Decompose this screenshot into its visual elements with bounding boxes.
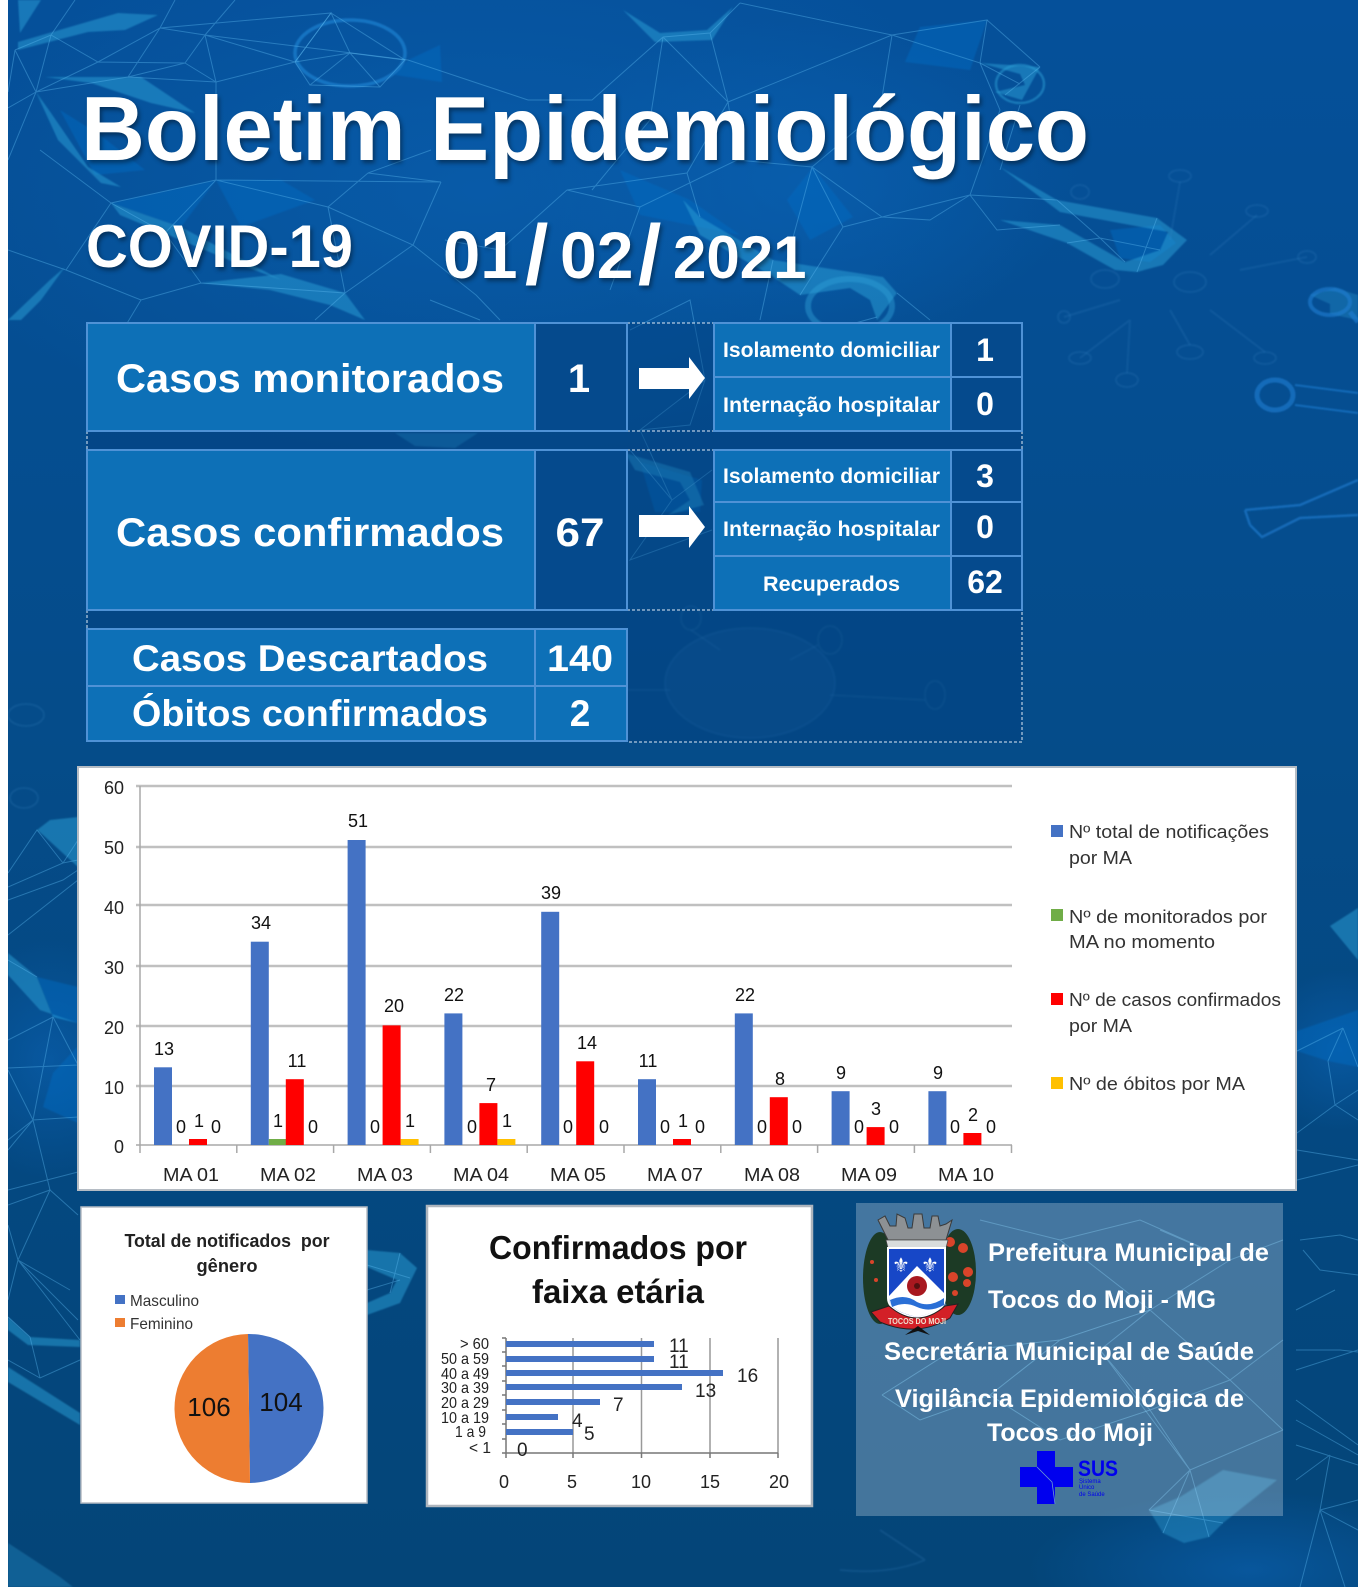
credits text: Vigilância Epidemiológica de bbox=[895, 1385, 1244, 1413]
breakdown: casos monitorados: 0 bbox=[976, 386, 994, 422]
icon: SUS logo: Único bbox=[1079, 1484, 1095, 1491]
icon: SUS logo bbox=[1020, 1451, 1118, 1504]
legend bbox=[1051, 822, 1281, 1094]
breakdown: casos confirmados: 3 bbox=[976, 458, 994, 494]
row: casos monitorados: Casos monitorados bbox=[116, 357, 504, 401]
pie legend bbox=[115, 1293, 199, 1333]
data labels: 1 bbox=[405, 1111, 415, 1131]
row: casos descartados: Casos Descartados bbox=[132, 638, 488, 679]
category labels: MA 03 bbox=[357, 1165, 413, 1185]
row: casos descartados: 140 bbox=[547, 638, 613, 679]
lighter mesh facets bbox=[37, 20, 1358, 1123]
data labels: 0 bbox=[370, 1117, 380, 1137]
breakdown: casos monitorados: 1 bbox=[976, 332, 994, 368]
panel: institution credits bbox=[856, 1203, 1283, 1516]
pie title bbox=[124, 1231, 330, 1276]
y axis labels: 10 bbox=[104, 1078, 124, 1098]
icon: municipal crest: TOCOS DO MOJI bbox=[888, 1317, 946, 1326]
age values: 4 bbox=[572, 1411, 583, 1432]
data labels: 34 bbox=[251, 913, 271, 933]
date: 01 bbox=[443, 218, 518, 293]
summary table bbox=[87, 323, 1022, 742]
age values: 5 bbox=[584, 1424, 595, 1445]
category labels: MA 09 bbox=[841, 1165, 897, 1185]
pie title: gênero bbox=[196, 1256, 258, 1276]
data labels: 0 bbox=[660, 1117, 670, 1137]
age values: 11 bbox=[669, 1352, 689, 1373]
icon: SUS logo: de Saúde bbox=[1079, 1492, 1105, 1498]
credits text bbox=[884, 1239, 1269, 1447]
row: casos confirmados: Casos confirmados bbox=[116, 511, 504, 555]
data labels: 13 bbox=[154, 1039, 174, 1059]
category labels: MA 01 bbox=[163, 1165, 219, 1185]
data labels: 0 bbox=[950, 1117, 960, 1137]
data labels: 1 bbox=[273, 1111, 283, 1131]
age x axis: 5 bbox=[567, 1472, 577, 1492]
date: 02 bbox=[560, 218, 633, 292]
icon: municipal crest: ⚜ bbox=[892, 1255, 910, 1277]
breakdown: casos confirmados: Isolamento domiciliar bbox=[723, 465, 940, 488]
pie: 104 bbox=[259, 1387, 303, 1417]
date: 2021 bbox=[673, 224, 806, 291]
row: casos descartados bbox=[87, 629, 627, 686]
data labels: 0 bbox=[889, 1117, 899, 1137]
age labels: 10 a 19 bbox=[441, 1410, 489, 1427]
arrow bbox=[639, 357, 705, 399]
date: / bbox=[525, 208, 548, 302]
data labels: 1 bbox=[678, 1111, 688, 1131]
data labels: 2 bbox=[968, 1105, 978, 1125]
age values bbox=[517, 1336, 758, 1461]
legend: Nº de monitorados por bbox=[1069, 907, 1267, 927]
data labels: 0 bbox=[563, 1117, 573, 1137]
age labels: > 60 bbox=[460, 1336, 489, 1353]
legend: Nº de casos confirmados bbox=[1069, 990, 1281, 1010]
row: casos monitorados: 1 bbox=[568, 357, 590, 401]
y axis labels: 50 bbox=[104, 838, 124, 858]
data labels: 20 bbox=[384, 996, 404, 1016]
age values: 13 bbox=[695, 1381, 716, 1402]
data labels: 11 bbox=[288, 1051, 306, 1071]
data labels: 51 bbox=[348, 811, 368, 831]
row: casos confirmados bbox=[87, 450, 627, 610]
breakdown: casos confirmados: 62 bbox=[967, 564, 1003, 600]
data labels: 9 bbox=[933, 1063, 943, 1083]
data labels: 0 bbox=[854, 1117, 864, 1137]
icon: municipal crest: ⚜ bbox=[921, 1255, 939, 1277]
age labels: 20 a 29 bbox=[441, 1395, 489, 1412]
age labels: < 1 bbox=[469, 1440, 491, 1457]
data labels: 39 bbox=[541, 883, 561, 903]
age chart title bbox=[489, 1229, 747, 1310]
category labels bbox=[163, 1165, 994, 1185]
category labels: MA 08 bbox=[744, 1165, 800, 1185]
pie: 106 bbox=[187, 1392, 231, 1422]
data labels: 0 bbox=[792, 1117, 802, 1137]
virus knobs and rings bbox=[295, 20, 1358, 537]
category labels: MA 02 bbox=[260, 1165, 316, 1185]
data labels: 0 bbox=[757, 1117, 767, 1137]
data labels: 0 bbox=[986, 1117, 996, 1137]
pie legend: Feminino bbox=[130, 1316, 193, 1333]
category labels: MA 04 bbox=[453, 1165, 509, 1185]
arrow bbox=[639, 506, 705, 548]
credits text: Tocos do Moji - MG bbox=[988, 1286, 1216, 1314]
row: óbitos confirmados: Óbitos confirmados bbox=[132, 692, 488, 734]
age labels: 1 a 9 bbox=[455, 1424, 486, 1441]
age bars bbox=[506, 1341, 723, 1435]
breakdown: casos monitorados bbox=[714, 323, 1022, 431]
row: casos confirmados: 67 bbox=[556, 511, 604, 555]
data labels: 11 bbox=[639, 1051, 657, 1071]
bars: confirmed bbox=[189, 1025, 981, 1145]
row: óbitos confirmados: 2 bbox=[570, 693, 590, 734]
data labels: 0 bbox=[308, 1117, 318, 1137]
age x axis bbox=[499, 1472, 789, 1492]
data labels: 1 bbox=[502, 1111, 512, 1131]
data labels: 9 bbox=[836, 1063, 846, 1083]
pie title: Total de notificados por bbox=[124, 1231, 330, 1251]
breakdown: casos monitorados: Isolamento domiciliar bbox=[723, 339, 940, 362]
y axis labels bbox=[104, 778, 124, 1157]
date bbox=[443, 208, 806, 302]
icon: SUS logo: SUS bbox=[1078, 1456, 1118, 1481]
panel: pie chart by gender bbox=[81, 1207, 367, 1503]
data labels: 0 bbox=[176, 1117, 186, 1137]
data labels: 1 bbox=[194, 1111, 204, 1131]
data labels: 0 bbox=[211, 1117, 221, 1137]
panel: bar chart by age bbox=[427, 1206, 812, 1506]
breakdown: casos confirmados: Recuperados bbox=[763, 573, 900, 596]
age x axis: 20 bbox=[769, 1472, 789, 1492]
age labels: 50 a 59 bbox=[441, 1351, 489, 1368]
age x axis: 15 bbox=[700, 1472, 720, 1492]
data labels: 22 bbox=[444, 985, 464, 1005]
age labels: 40 a 49 bbox=[441, 1366, 489, 1383]
data labels: 0 bbox=[695, 1117, 705, 1137]
age chart grid bbox=[502, 1338, 778, 1458]
data labels: 3 bbox=[871, 1099, 881, 1119]
subtitle: COVID-19: COVID-19 bbox=[86, 213, 353, 280]
legend: Nº total de notificações bbox=[1069, 822, 1269, 842]
bars: total notifications bbox=[154, 840, 946, 1145]
age labels: 30 a 39 bbox=[441, 1380, 489, 1397]
category labels: MA 07 bbox=[647, 1165, 703, 1185]
age values: 7 bbox=[613, 1395, 624, 1416]
legend: por MA bbox=[1069, 848, 1132, 868]
breakdown: casos monitorados: Internação hospitalar bbox=[723, 394, 940, 417]
grid lines and axes bbox=[136, 786, 1012, 1153]
y axis labels: 0 bbox=[114, 1137, 124, 1157]
y axis labels: 20 bbox=[104, 1018, 124, 1038]
legend: Nº de óbitos por MA bbox=[1069, 1074, 1245, 1094]
age chart title: faixa etária bbox=[532, 1273, 705, 1310]
credits text: Prefeitura Municipal de bbox=[988, 1239, 1269, 1267]
bars: monitored bbox=[269, 1139, 287, 1145]
age x axis: 0 bbox=[499, 1472, 509, 1492]
date: / bbox=[638, 208, 661, 302]
category labels: MA 10 bbox=[938, 1165, 994, 1185]
breakdown: casos confirmados: Internação hospitalar bbox=[723, 518, 940, 541]
age values: 0 bbox=[517, 1440, 528, 1461]
row: casos monitorados bbox=[87, 323, 627, 431]
age labels bbox=[441, 1336, 491, 1457]
data labels: 22 bbox=[735, 985, 755, 1005]
credits text: Tocos do Moji bbox=[987, 1419, 1153, 1447]
y axis labels: 30 bbox=[104, 958, 124, 978]
icon: SUS logo: Sistema bbox=[1079, 1479, 1101, 1485]
credits text: Secretária Municipal de Saúde bbox=[884, 1338, 1254, 1366]
age values: 16 bbox=[737, 1366, 758, 1387]
breakdown: casos confirmados: 0 bbox=[976, 509, 994, 545]
data labels: 8 bbox=[775, 1069, 785, 1089]
age chart title: Confirmados por bbox=[489, 1229, 747, 1266]
translucent backing and dashed guides bbox=[87, 323, 1022, 742]
age x axis: 10 bbox=[631, 1472, 651, 1492]
data labels: 14 bbox=[577, 1033, 597, 1053]
data labels bbox=[154, 811, 996, 1137]
breakdown: casos confirmados bbox=[714, 450, 1022, 610]
row: óbitos confirmados bbox=[87, 686, 627, 741]
icon: municipal crest bbox=[863, 1214, 976, 1335]
y axis labels: 40 bbox=[104, 898, 124, 918]
pie legend: Masculino bbox=[130, 1293, 199, 1310]
pie bbox=[174, 1334, 324, 1483]
panel: bar chart by MA bbox=[78, 767, 1296, 1190]
data labels: 0 bbox=[599, 1117, 609, 1137]
data labels: 0 bbox=[467, 1117, 477, 1137]
legend: por MA bbox=[1069, 1016, 1132, 1036]
y axis labels: 60 bbox=[104, 778, 124, 798]
title: Boletim Epidemiológico bbox=[81, 79, 1089, 180]
legend: MA no momento bbox=[1069, 932, 1215, 952]
age values: 11 bbox=[669, 1336, 689, 1357]
data labels: 7 bbox=[486, 1075, 496, 1095]
bars: deaths bbox=[401, 1139, 515, 1145]
category labels: MA 05 bbox=[550, 1165, 606, 1185]
